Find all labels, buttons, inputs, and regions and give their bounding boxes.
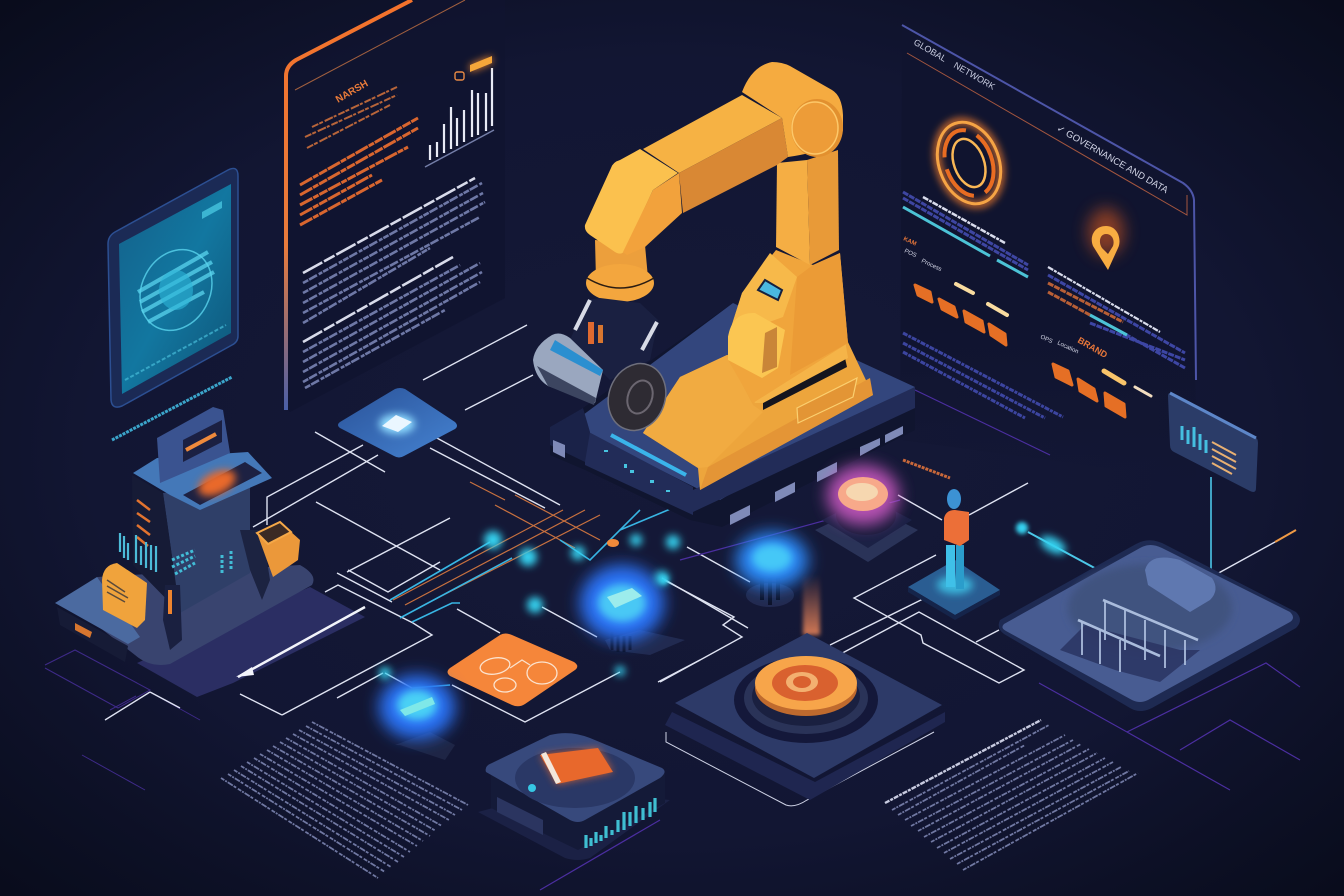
heat tray	[183, 462, 262, 505]
base recess	[797, 378, 857, 423]
orange button row one	[915, 285, 1006, 345]
orange heading: NARSH	[334, 78, 370, 106]
machine body	[1145, 558, 1216, 612]
tablet bottom stripes	[125, 325, 226, 380]
upper plate	[90, 565, 314, 665]
right cyan stripe	[1090, 315, 1127, 335]
torso	[944, 510, 969, 546]
bright orange text lines	[300, 118, 418, 225]
connector lines: cyan	[390, 477, 1211, 688]
icon card: small blue card	[338, 388, 457, 458]
light side plate	[55, 577, 140, 644]
white text block one	[303, 178, 475, 273]
cyan progress stripe	[903, 207, 1028, 277]
chip bars	[586, 798, 655, 848]
disc rings	[734, 657, 878, 743]
small tool	[163, 585, 182, 650]
blue text stripes	[903, 192, 1028, 270]
white text block two	[303, 257, 453, 342]
text block bottom right body	[892, 725, 1138, 870]
small orange caption	[903, 460, 950, 478]
orange button row two	[1053, 364, 1125, 417]
icon: glowing ring	[926, 112, 1012, 214]
small labels: Location	[1056, 340, 1079, 355]
tool roller	[533, 334, 603, 403]
right text stripes	[1048, 267, 1160, 332]
pink glowing beacon	[815, 465, 918, 562]
panel: right dashboard panel	[900, 25, 1196, 480]
panel heading left: GLOBAL	[912, 37, 948, 64]
platform status dots	[606, 450, 668, 492]
grey text lines two	[303, 263, 482, 388]
small labels: POS	[903, 248, 917, 259]
glowing pills two	[1104, 371, 1151, 396]
machine base rubble	[1060, 625, 1200, 682]
upper arm top face	[643, 95, 782, 173]
small orange marker	[607, 539, 619, 547]
decorative purple lines	[540, 390, 1300, 890]
small labels: OPS	[1039, 334, 1053, 345]
panel: orange text panel	[284, 0, 505, 412]
connector lines: white	[105, 325, 1275, 722]
button platform	[665, 633, 945, 800]
bottom chip device	[478, 733, 670, 860]
glow: blue node centre	[580, 565, 685, 655]
machine frame	[1078, 600, 1198, 672]
wrist neck	[595, 240, 648, 280]
robot arm	[533, 62, 873, 490]
card lines	[107, 580, 128, 602]
head	[947, 489, 961, 509]
tower top	[133, 452, 272, 510]
grey text lines one	[303, 183, 485, 323]
right machinery plate	[999, 540, 1300, 711]
right orange stripes	[1048, 283, 1123, 322]
small labels: KAM	[902, 236, 917, 248]
panel heading right: ✓ GOVERNANCE AND DATA	[1054, 123, 1170, 196]
icon: glowing pin	[1088, 208, 1124, 270]
frame around disc platform	[666, 732, 934, 806]
disc face	[755, 656, 857, 710]
arrow on platform	[236, 607, 365, 677]
small labels	[902, 236, 1110, 360]
cyan chart bars	[120, 533, 156, 572]
glow: blue node left	[379, 675, 455, 760]
tower top screen	[157, 407, 230, 483]
station: left machine	[55, 407, 365, 697]
orange card	[102, 563, 147, 628]
tower right face	[163, 487, 250, 613]
tablet small bar	[202, 201, 222, 219]
glow: blue node right	[736, 532, 808, 607]
arm base lower body	[643, 340, 873, 490]
bar chart	[425, 68, 494, 167]
legs	[946, 545, 955, 587]
chip left bars	[497, 797, 543, 835]
text block bottom right heading	[885, 720, 1041, 803]
platform cyan stripe	[611, 435, 686, 475]
small labels: Process	[920, 258, 942, 273]
decorative purple grid left	[45, 650, 200, 790]
pedestal	[728, 250, 848, 403]
tablet caption	[112, 377, 232, 440]
person on pedestal	[908, 489, 1000, 620]
lower text stripes	[903, 333, 1063, 418]
right purple stripes	[1048, 275, 1185, 368]
tool bracket	[570, 298, 658, 380]
glowing pills one	[956, 284, 1007, 315]
orange text lines	[305, 87, 397, 148]
text block bottom left	[221, 722, 468, 878]
vertical column	[776, 160, 810, 265]
panel heading middle: NETWORK	[952, 60, 997, 92]
base slot	[763, 358, 847, 410]
platform side labels	[553, 426, 903, 525]
elbow	[585, 149, 678, 254]
orange tag device	[240, 522, 300, 600]
chart highlight tag	[455, 56, 492, 80]
icon card: orange card	[448, 634, 577, 706]
panel: teal tablet	[108, 168, 238, 407]
orange chip	[540, 748, 613, 784]
cyan dots	[172, 550, 231, 574]
wrist flange	[586, 264, 654, 302]
lower platform	[137, 587, 365, 697]
orange heat glow	[194, 465, 240, 501]
base tier	[728, 340, 848, 403]
chip dot	[528, 784, 536, 792]
tower left face	[132, 475, 180, 613]
small glowing connector nodes	[379, 522, 1069, 679]
shoulder joint	[742, 62, 843, 157]
blue display	[758, 280, 782, 300]
chart monitor	[1168, 393, 1258, 492]
left text bars	[923, 197, 1005, 243]
station: robot arm platform	[550, 303, 915, 527]
orange beam	[803, 575, 820, 635]
tablet icon: shield and stripes	[126, 237, 226, 343]
connector lines: orange	[393, 482, 1296, 607]
small labels: BRAND	[1076, 335, 1110, 360]
tool disc	[599, 355, 675, 439]
upper arm side face	[679, 118, 788, 213]
pedestal cowl	[728, 313, 785, 378]
tower vent lines	[137, 500, 150, 546]
